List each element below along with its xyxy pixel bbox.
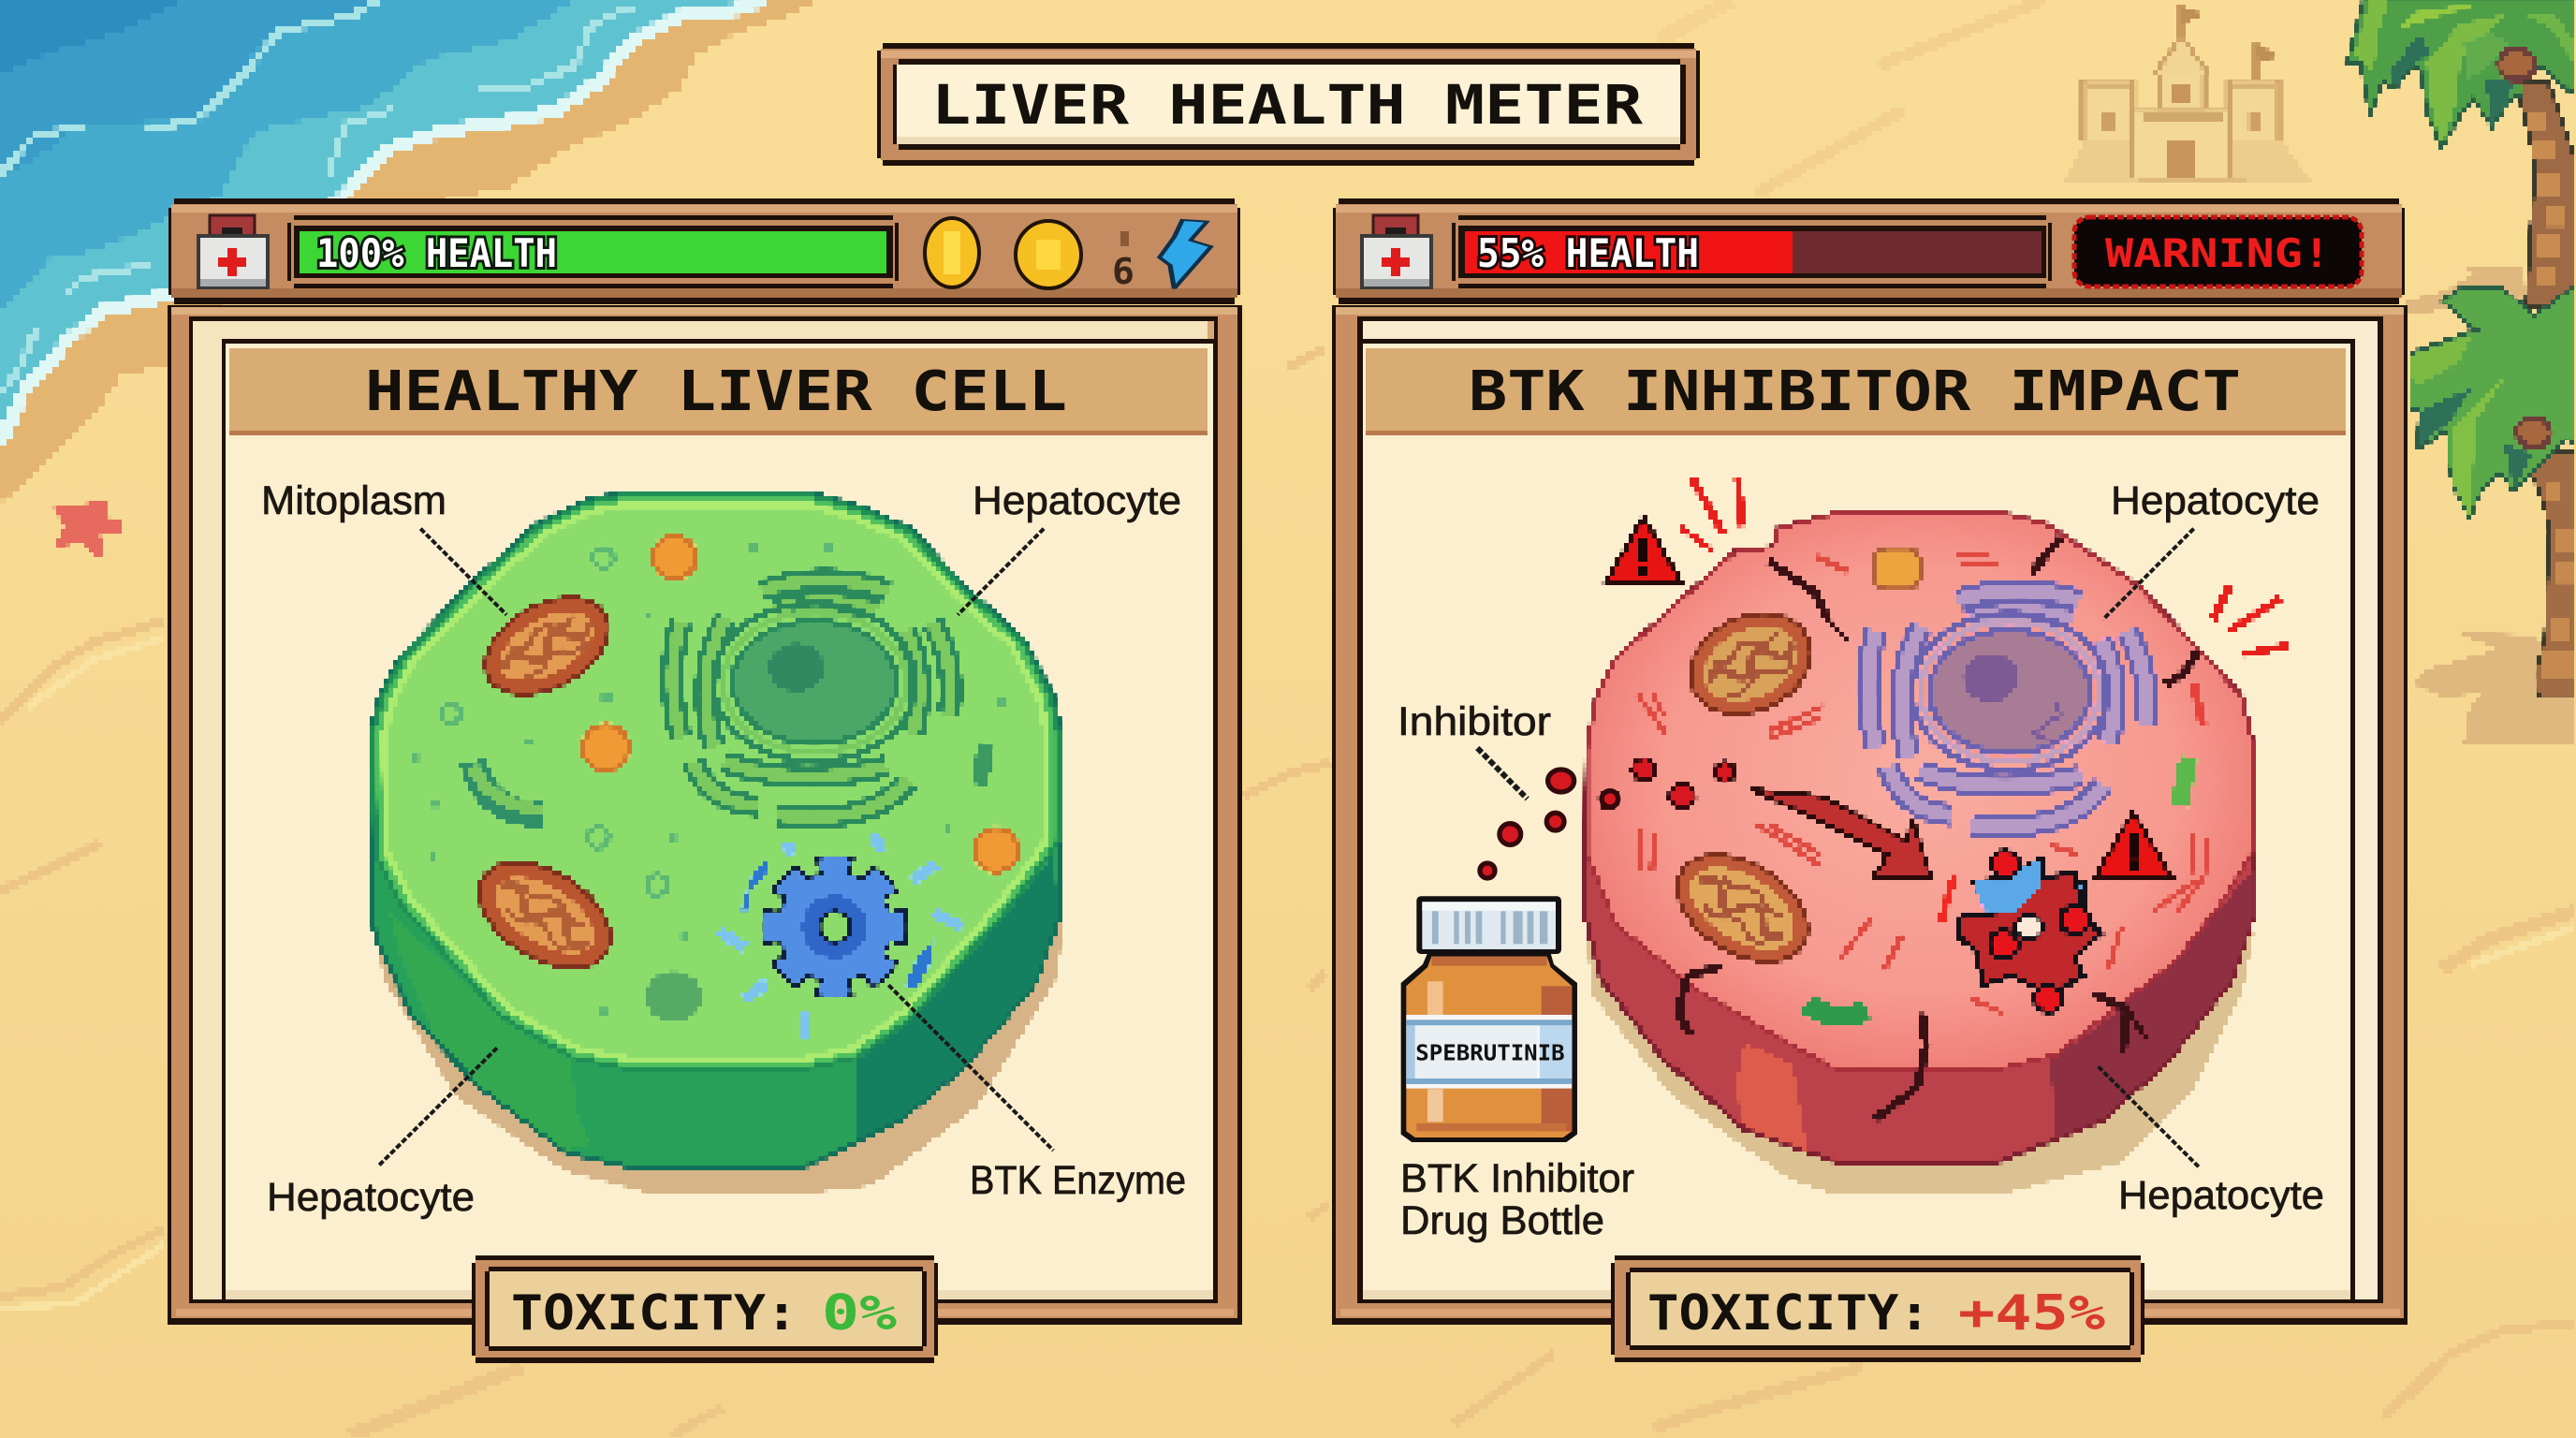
lower fronds <box>2410 285 2576 519</box>
cell shadow <box>371 916 1063 1195</box>
heading band <box>229 348 1208 431</box>
mitochondrion lower <box>1658 833 1827 983</box>
label: hepatocyte bottom: Hepatocyte <box>267 1175 475 1220</box>
icon: sandcastle <box>2064 5 2310 183</box>
arrow: inhibitor to enzyme <box>1752 789 1931 878</box>
damaged cell diagram <box>1585 478 2290 1195</box>
panel: healthy liver cell <box>168 198 1242 1363</box>
label: drug bottle: Drug Bottle <box>1400 1198 1604 1243</box>
health value: 100% HEALTH <box>316 230 557 276</box>
icon: gold coin <box>925 218 979 287</box>
leader line: inhibitor <box>1477 748 1528 799</box>
card frame left <box>168 305 1242 1325</box>
toxicity badge healthy <box>472 1255 938 1363</box>
cracks <box>1678 538 2199 1120</box>
panel heading: HEALTHY LIVER CELL <box>365 359 1067 423</box>
orange droplet <box>1875 549 1920 589</box>
health bar frame <box>294 215 893 288</box>
icon: starfish <box>53 500 124 556</box>
cell body side <box>1585 512 2253 1162</box>
small vesicles <box>441 548 667 895</box>
icon: lightning bolt <box>1160 220 1211 288</box>
damage sparks <box>1679 478 2290 654</box>
toxicity label: TOXICITY: <box>511 1285 798 1342</box>
label: inhibitor: Inhibitor <box>1398 699 1551 744</box>
status bar: healthy <box>168 198 1240 304</box>
leader lines: damaged cell <box>2099 529 2199 1167</box>
drug bottle and inhibitor dots <box>1401 748 1618 1142</box>
label: hepatocyte bottom: Hepatocyte <box>2118 1173 2324 1218</box>
icon: inhibited enzyme gear <box>1960 851 2100 1012</box>
label: hepatocyte top: Hepatocyte <box>2111 478 2320 523</box>
ripple highlights <box>0 638 2576 1309</box>
icon: BTK enzyme gear <box>772 866 897 988</box>
icon: gold coin round <box>1016 221 1081 288</box>
icon: warning triangle upper <box>1605 517 1682 583</box>
healthy cell diagram <box>371 493 1063 1195</box>
health value: 55% HEALTH <box>1477 230 1699 276</box>
panel heading: BTK INHIBITOR IMPACT <box>1469 359 2241 423</box>
icon: medkit <box>198 215 268 287</box>
mitochondrion upper <box>1673 594 1828 733</box>
icon: stray counter <box>1112 231 1134 292</box>
label: drug bottle: BTK Inhibitor <box>1400 1156 1634 1201</box>
panel: BTK inhibitor impact <box>1332 198 2408 1362</box>
label: mitoplasm: Mitoplasm <box>261 478 446 523</box>
inhibitor molecules in cell <box>1600 758 1734 809</box>
lower trunk <box>2520 444 2576 697</box>
card frame right <box>1332 305 2408 1325</box>
green organelles <box>1806 756 2189 1017</box>
cell shadow <box>1585 916 2253 1195</box>
orange lipid droplets <box>583 536 1018 872</box>
label: BTK enzyme: BTK Enzyme <box>970 1158 1186 1203</box>
inhibitor molecules outside cell <box>1480 770 1618 878</box>
upper trunk <box>2517 81 2576 306</box>
leader line: hepatocyte top <box>2103 529 2194 620</box>
upper fronds <box>2348 0 2576 148</box>
cell top surface <box>371 493 1061 1071</box>
bottle label <box>1406 1015 1572 1089</box>
warning badge <box>2074 217 2362 286</box>
leader line: BTK enzyme <box>888 985 1053 1151</box>
cell top surface <box>1588 512 2253 1069</box>
health bar fill 55 percent <box>1465 231 1793 273</box>
toxicity badge impact <box>1611 1255 2144 1362</box>
nucleus and purple stacks <box>1867 591 2146 827</box>
health bar fill 100 percent <box>300 231 886 273</box>
label: hepatocyte top: Hepatocyte <box>973 478 1181 523</box>
title banner <box>877 43 1700 166</box>
health bar frame <box>1458 215 2046 288</box>
toxicity value: 0% <box>822 1285 897 1342</box>
label: drug bottle <box>1400 1156 1634 1243</box>
toxicity label: TOXICITY: <box>1647 1285 1930 1342</box>
leader line: hepatocyte bottom <box>377 1048 497 1167</box>
enzyme activity sparks <box>719 834 962 1038</box>
leader line: hepatocyte bottom <box>2099 1066 2199 1167</box>
green organelles <box>473 743 987 1022</box>
palm shadows <box>2408 265 2576 745</box>
heading band <box>1366 348 2346 431</box>
ocean and shoreline <box>0 0 821 504</box>
title text: LIVER HEALTH METER <box>931 73 1643 137</box>
cell body side <box>371 493 1061 1167</box>
icon: warning triangle lower <box>2095 812 2173 878</box>
mitochondrion upper <box>468 578 626 714</box>
leader lines: healthy cell <box>377 529 1053 1167</box>
bottle label: SPEBRUTINIB <box>1415 1040 1565 1066</box>
icon: palm trees <box>2348 0 2576 745</box>
endoplasmic stacks and nucleus <box>672 580 951 817</box>
red damage marks <box>1637 554 2208 1013</box>
status bar: damaged <box>1333 198 2405 304</box>
leader line: hepatocyte top <box>958 529 1044 615</box>
icon: stray counter: 6 <box>1112 251 1134 292</box>
bottle body <box>1401 953 1577 1142</box>
bottle cap <box>1416 896 1561 954</box>
warning badge: WARNING! <box>2105 230 2331 276</box>
empty health bar <box>1465 231 2042 273</box>
toxicity value: +45% <box>1958 1285 2105 1342</box>
icon: medkit <box>1362 215 1431 287</box>
mitochondrion lower <box>460 841 630 990</box>
leader line: mitoplasm <box>420 529 506 615</box>
